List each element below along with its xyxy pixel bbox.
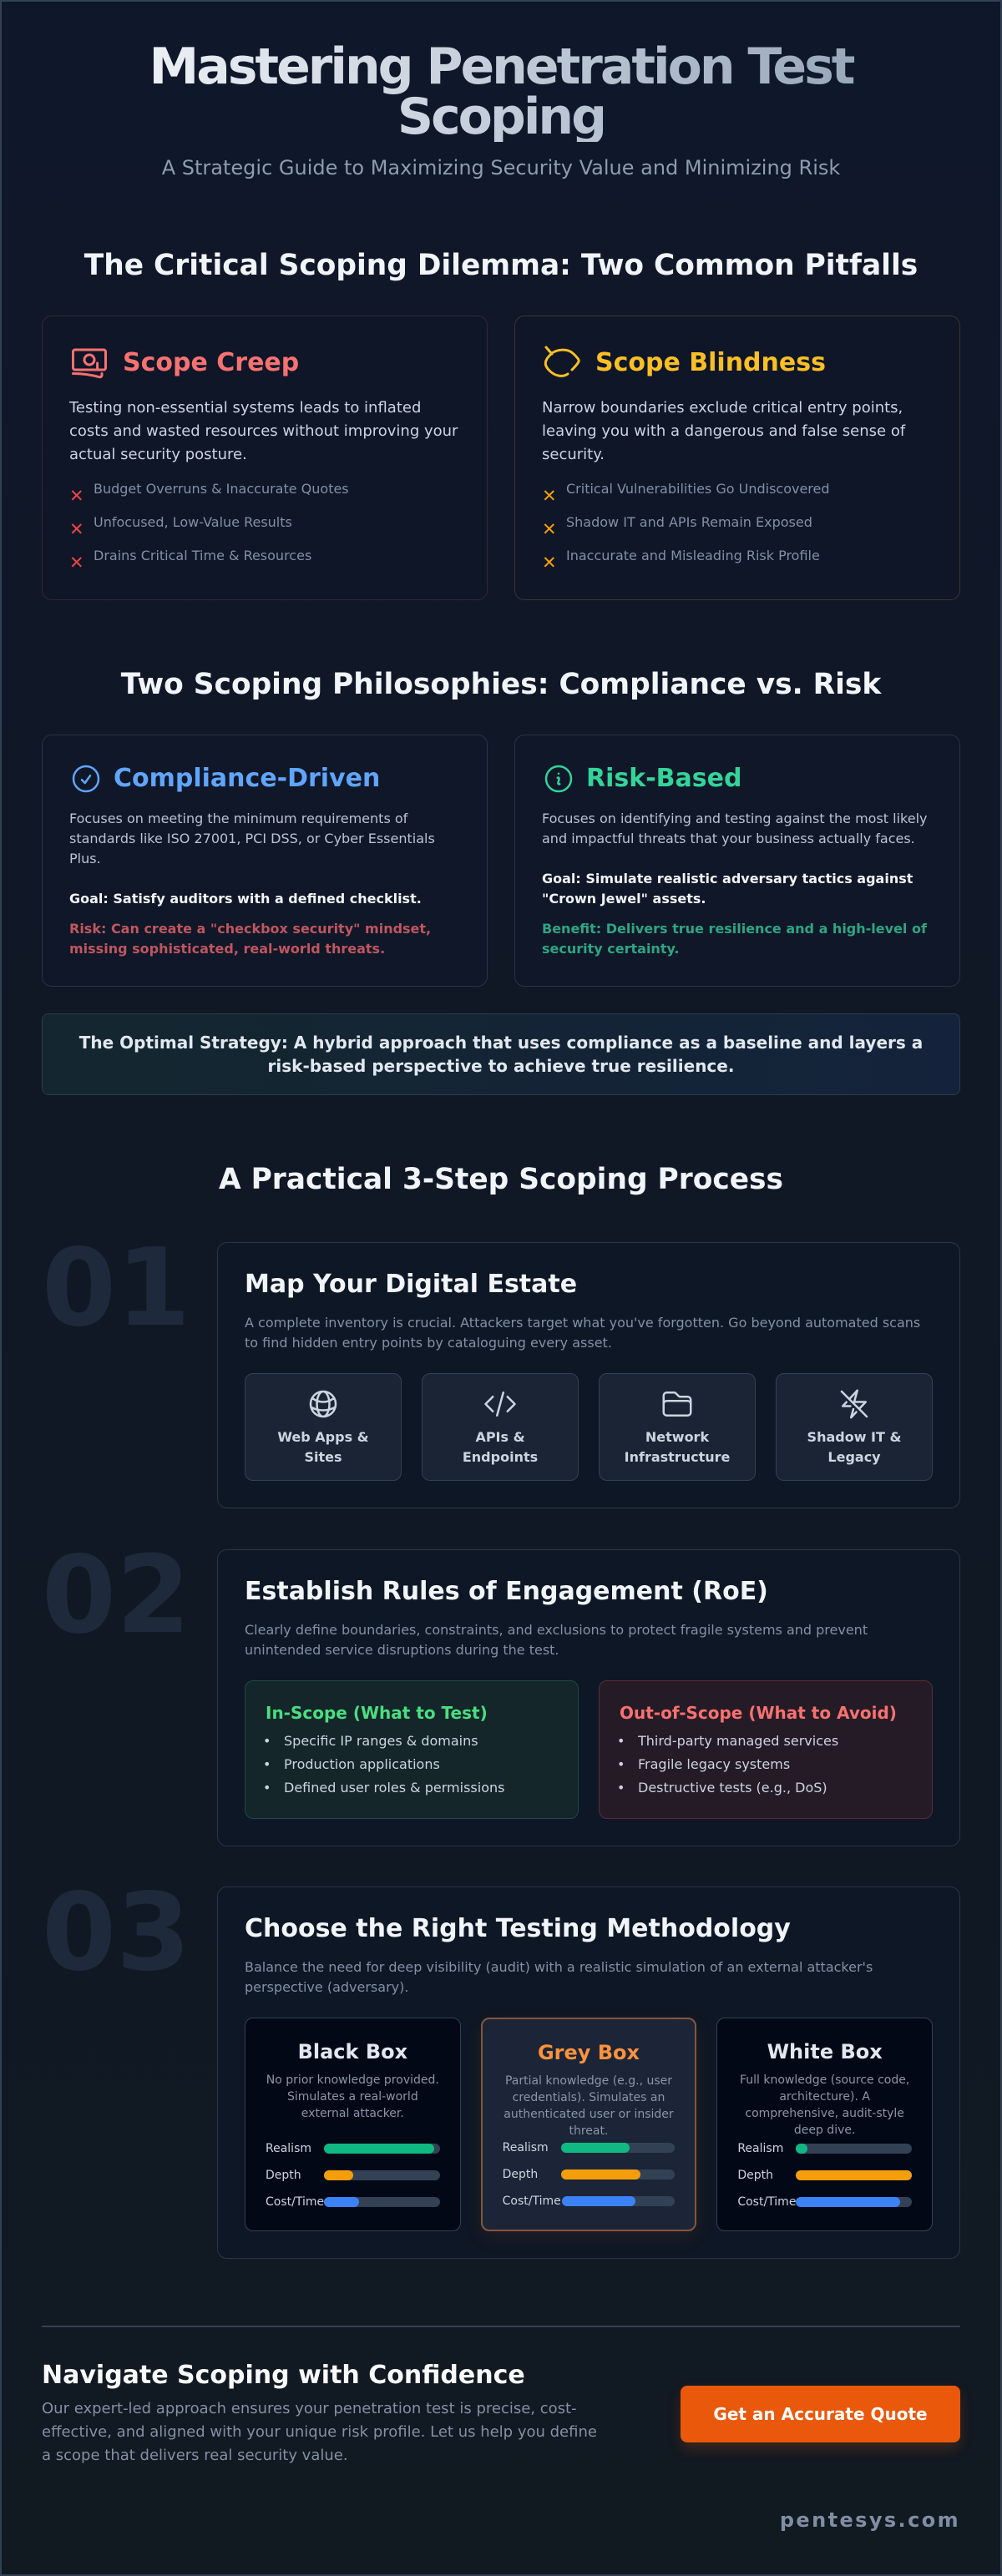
- icon: folder: [663, 1392, 691, 1417]
- meter: realism: [266, 2142, 440, 2155]
- description: Testing non-essential systems leads to inflated: [69, 399, 421, 417]
- box title: Out-of-Scope (What to Avoid): [620, 1703, 897, 1723]
- list: consequences: Inaccurate and Misleading Risk Profile: [566, 548, 820, 563]
- box: in-scope: •: [263, 1780, 271, 1796]
- meter: cost: Cost/Time: [266, 2195, 324, 2209]
- asset: network: [599, 1373, 756, 1481]
- meter: realism: [503, 2141, 675, 2154]
- method description: Partial knowledge (e.g., user credentials). Simulates an authenticated user or insider threat.: [504, 2074, 674, 2138]
- goal: Goal: Satisfy auditors with a defined checklist.: [69, 891, 422, 907]
- step description: Balance the need for deep visibility (audit) with a realistic simulation of an external attacker's: [245, 1959, 873, 1975]
- title: Mastering Penetration Test: [149, 38, 853, 96]
- label: [625, 1429, 730, 1465]
- list item: Destructive tests (e.g., DoS): [638, 1780, 827, 1796]
- step title: Establish Rules of Engagement (RoE): [245, 1577, 768, 1606]
- description: standards like ISO 27001, PCI DSS, or Cyber Essentials: [69, 831, 435, 846]
- step description: [245, 1622, 868, 1658]
- icon: info circle: [544, 765, 573, 793]
- meter: cost: [737, 2195, 912, 2209]
- list: consequences: [542, 481, 830, 573]
- callout: optimal strategy: risk-based perspective to achieve true resilience.: [268, 1056, 734, 1076]
- list item: Specific IP ranges & domains: [284, 1733, 478, 1749]
- asset: shadow it: [776, 1373, 933, 1481]
- goal: "Crown Jewel" assets.: [542, 891, 706, 907]
- description: [542, 811, 927, 846]
- heading: process: A Practical 3-Step Scoping Process: [219, 1163, 783, 1196]
- label: Infrastructure: [625, 1449, 730, 1465]
- list: consequences: [69, 481, 349, 573]
- meter: realism: Realism: [266, 2142, 311, 2155]
- label: APIs &: [475, 1429, 525, 1445]
- label: [277, 1429, 369, 1465]
- panel: scope blindness: [514, 316, 960, 600]
- step number 02: 02: [42, 1533, 190, 1658]
- title: Scoping: [397, 88, 605, 146]
- method: grey box: [481, 2018, 696, 2231]
- description: leaving you with a dangerous and false sense of: [542, 422, 905, 440]
- box: out-of-scope: •: [617, 1733, 625, 1749]
- description: [68, 399, 458, 463]
- step description: Clearly define boundaries, constraints, and exclusions to protect fragile systems and prevent: [245, 1622, 868, 1638]
- risk: missing sophisticated, real-world threats.: [69, 941, 385, 957]
- meter: realism: [737, 2142, 912, 2155]
- step title: Choose the Right Testing Methodology: [245, 1914, 791, 1943]
- method description: No prior knowledge provided. Simulates a real-world external attacker.: [266, 2073, 439, 2120]
- footer text: effective, and aligned with your unique risk profile. Let us help you define: [42, 2423, 597, 2441]
- list item: Production applications: [284, 1756, 440, 1772]
- meter: depth: Depth: [503, 2168, 538, 2181]
- step title: Map Your Digital Estate: [245, 1270, 577, 1299]
- label: Shadow IT &: [807, 1429, 901, 1445]
- step number 01: 01: [42, 1226, 190, 1351]
- heading: Risk-Based: [586, 764, 741, 793]
- description: costs and wasted resources without improving your: [69, 422, 458, 440]
- risk: Risk: Can create a "checkbox security" mindset,: [69, 921, 431, 937]
- heading: scoping dilemma: The Critical Scoping Dilemma: Two Common Pitfalls: [84, 249, 918, 282]
- step description: [245, 1959, 873, 1995]
- benefit: security certainty.: [542, 941, 680, 957]
- footer text: Our expert-led approach ensures your penetration test is precise, cost-: [42, 2400, 577, 2417]
- step description: perspective (adversary).: [245, 1979, 408, 1995]
- step description: [245, 1315, 920, 1351]
- step description: unintended service disruptions during the test.: [245, 1642, 559, 1658]
- method title: White Box: [767, 2040, 883, 2063]
- meter: depth: [503, 2168, 675, 2181]
- description: security.: [542, 446, 605, 463]
- footer text: [42, 2400, 597, 2464]
- list item: Fragile legacy systems: [638, 1756, 790, 1772]
- benefit: Benefit: Delivers true resilience and a high-level of: [542, 921, 927, 937]
- description: [69, 811, 435, 866]
- box: in-scope: •: [263, 1756, 271, 1772]
- panel: step 2: [217, 1549, 960, 1846]
- risk: [69, 921, 431, 957]
- list: consequences: ✕: [542, 486, 557, 506]
- description: [542, 399, 906, 463]
- goal: [542, 871, 913, 907]
- button: get a quote: Get an Accurate Quote: [713, 2404, 928, 2424]
- panel: risk-based: [514, 735, 960, 987]
- meter: cost: [266, 2195, 440, 2209]
- box title: In-Scope (What to Test): [266, 1703, 488, 1723]
- goal: Goal: Simulate realistic adversary tactics against: [542, 871, 913, 886]
- meter: depth: [266, 2169, 440, 2182]
- panel: step 1: [217, 1242, 960, 1508]
- icon: eye slash: [544, 346, 580, 377]
- heading: Compliance-Driven: [114, 764, 380, 793]
- panel: step 3: [217, 1887, 960, 2259]
- meter: realism: Realism: [737, 2142, 783, 2155]
- method: black box: [245, 2018, 461, 2231]
- subtitle: A Strategic Guide to Maximizing Security Value and Minimizing Risk: [162, 156, 840, 179]
- panel: compliance-driven: [42, 735, 488, 987]
- meter: depth: Depth: [737, 2169, 773, 2182]
- label: Legacy: [827, 1449, 881, 1465]
- description: Narrow boundaries exclude critical entry points,: [542, 399, 903, 417]
- meter: cost: Cost/Time: [737, 2195, 796, 2209]
- label: [463, 1429, 538, 1465]
- heading: Scope Creep: [123, 348, 299, 377]
- panel: scope creep: [42, 316, 488, 600]
- list: consequences: ✕: [69, 486, 84, 506]
- box: in-scope: [245, 1680, 579, 1819]
- step description: to find hidden entry points by cataloguing every asset.: [245, 1335, 612, 1351]
- title: [100, 42, 902, 142]
- method: white box: [716, 2018, 933, 2231]
- icon: banknote: [72, 349, 107, 379]
- meter: cost: [503, 2195, 675, 2208]
- label: Network: [645, 1429, 709, 1445]
- callout: optimal strategy: The Optimal Strategy: A hybrid approach that uses compliance as a baseline and layers a: [79, 1033, 923, 1053]
- brand: pentesys.com: pentesys.com: [780, 2508, 960, 2532]
- icon: check circle: [72, 765, 100, 793]
- list: consequences: Budget Overruns & Inaccurate Quotes: [94, 481, 349, 497]
- box: out-of-scope: •: [617, 1780, 625, 1796]
- list: consequences: ✕: [542, 519, 557, 539]
- description: actual security posture.: [69, 446, 247, 463]
- box: out-of-scope: •: [617, 1756, 625, 1772]
- list: consequences: Critical Vulnerabilities Go Undiscovered: [566, 481, 830, 497]
- label: Endpoints: [463, 1449, 538, 1465]
- method title: Black Box: [298, 2040, 407, 2063]
- icon: globe: [309, 1391, 337, 1417]
- meter: depth: [737, 2169, 912, 2182]
- callout: optimal strategy: [42, 1013, 960, 1095]
- description: and impactful threats that your business actually faces.: [542, 831, 915, 846]
- box: out-of-scope: [599, 1680, 933, 1819]
- list: consequences: Shadow IT and APIs Remain Exposed: [566, 514, 812, 530]
- list: consequences: ✕: [69, 519, 84, 539]
- label: [807, 1429, 901, 1465]
- step number 03: 03: [42, 1871, 190, 1995]
- footer heading: Navigate Scoping with Confidence: [42, 2361, 525, 2390]
- list: consequences: Drains Critical Time & Resources: [94, 548, 311, 563]
- button: get a quote: [681, 2386, 960, 2442]
- step description: A complete inventory is crucial. Attackers target what you've forgotten. Go beyond automated scans: [245, 1315, 920, 1331]
- description: Plus.: [69, 851, 101, 866]
- heading: Scope Blindness: [595, 348, 826, 377]
- method description: Full knowledge (source code, architecture). A comprehensive, audit-style deep dive.: [740, 2073, 909, 2137]
- label: Web Apps &: [277, 1429, 369, 1445]
- icon: code: [484, 1392, 516, 1417]
- box: in-scope: •: [263, 1733, 271, 1749]
- method title: Grey Box: [538, 2041, 640, 2064]
- meter: depth: Depth: [266, 2169, 301, 2182]
- footer text: a scope that delivers real security value.: [42, 2447, 348, 2464]
- list item: Third-party managed services: [638, 1733, 838, 1749]
- heading: philosophies: Two Scoping Philosophies: Compliance vs. Risk: [121, 668, 881, 701]
- asset: web apps: [245, 1373, 402, 1481]
- meter: cost: Cost/Time: [503, 2195, 561, 2208]
- description: Focuses on meeting the minimum requirements of: [69, 811, 407, 826]
- description: Focuses on identifying and testing against the most likely: [542, 811, 927, 826]
- icon: bolt slash: [840, 1389, 868, 1419]
- label: Sites: [304, 1449, 342, 1465]
- list: consequences: ✕: [69, 553, 84, 573]
- list item: Defined user roles & permissions: [284, 1780, 504, 1796]
- meter: realism: Realism: [503, 2141, 549, 2154]
- list: consequences: ✕: [542, 553, 557, 573]
- benefit: [542, 921, 927, 957]
- list: consequences: Unfocused, Low-Value Results: [94, 514, 292, 530]
- asset: apis: [422, 1373, 579, 1481]
